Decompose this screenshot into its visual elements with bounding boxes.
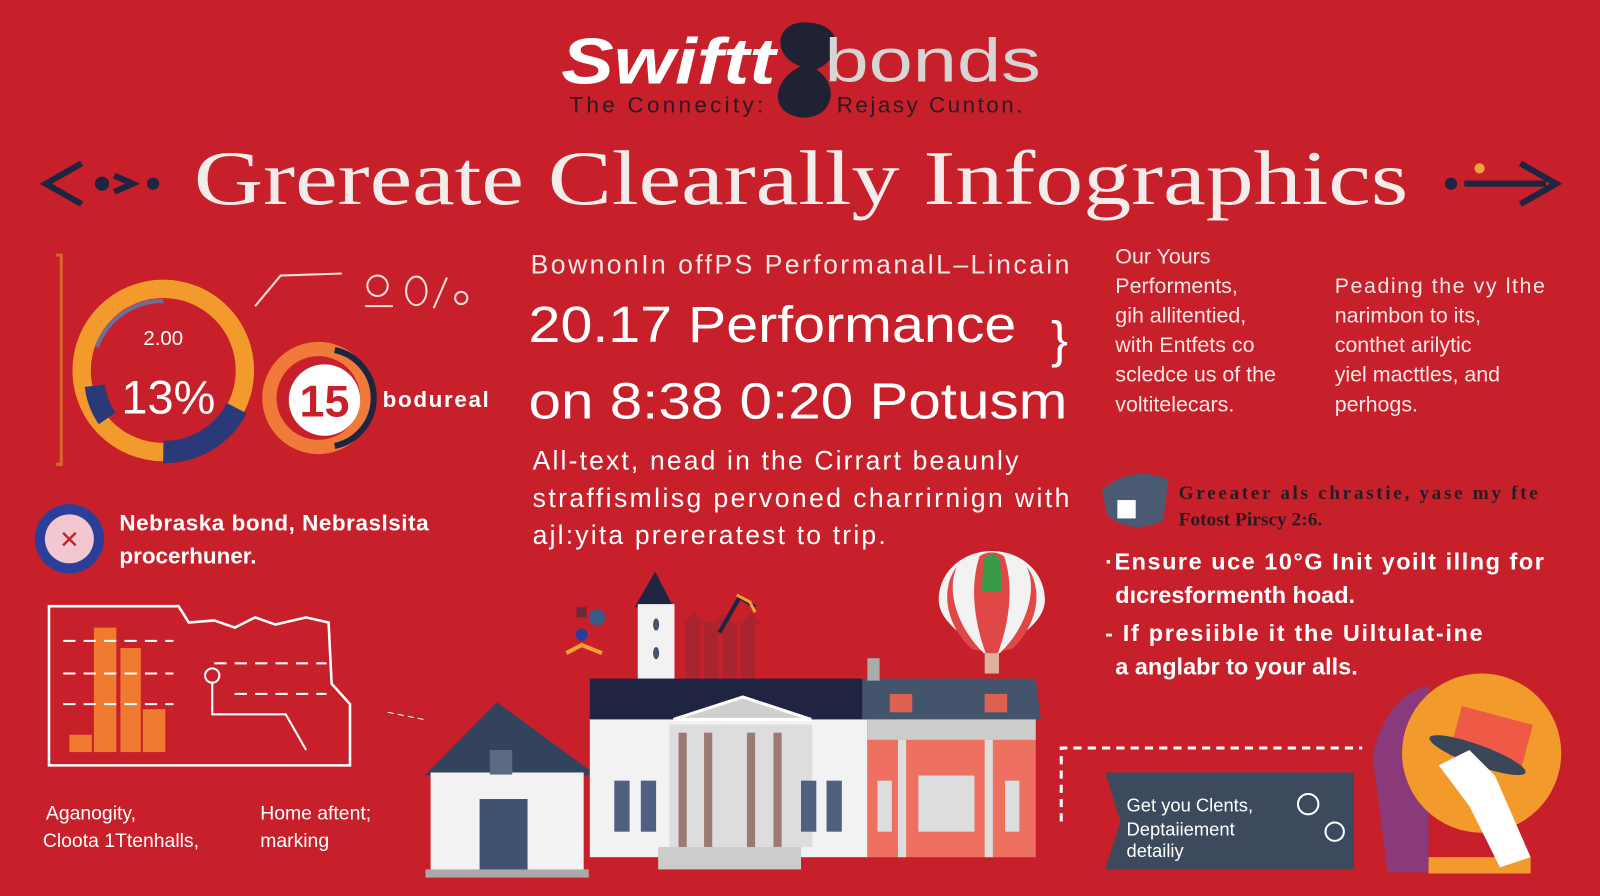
bottom labels — [43, 802, 371, 852]
right callout text: Greeater als chrastie, yase my fte — [1179, 483, 1538, 504]
title: Grereate Clearally Infographics — [194, 135, 1408, 221]
dark box: Deptaiiement — [1127, 819, 1235, 840]
text middle: } — [1051, 311, 1068, 368]
bullets: ·Ensure uce 10°G Init yoilt illng for — [1105, 548, 1544, 574]
badge Nebraska: ✕ — [59, 527, 80, 554]
badge Nebraska — [35, 504, 429, 574]
dark box: detailiy — [1127, 840, 1184, 861]
bottom labels: Aganogity, — [46, 802, 136, 824]
dashed connector — [1061, 748, 1362, 821]
right columns text: Peading the vy lthe — [1335, 274, 1545, 298]
badge Nebraska: procerhuner. — [119, 543, 257, 568]
logo — [561, 22, 1041, 118]
text middle: ajl:yita prereratest to trip. — [533, 520, 886, 550]
icons top — [255, 274, 467, 308]
text middle — [529, 250, 1069, 550]
right columns text: gih allitentied, — [1115, 303, 1246, 327]
right columns text: narimbon to its, — [1335, 303, 1481, 327]
hand illustration — [1372, 674, 1561, 874]
text middle: 20.17 Performance — [529, 296, 1016, 353]
buildings — [424, 571, 1041, 878]
badge Nebraska: Nebraska bond, Nebraslsita — [119, 511, 429, 536]
text middle: straffismlisg pervoned charrirnign with — [533, 483, 1069, 513]
arrow left — [46, 163, 156, 204]
right columns text: yiel macttles, and — [1335, 363, 1500, 387]
right columns text: Our Yours — [1115, 244, 1211, 268]
right columns text: with Entfets co — [1114, 333, 1255, 357]
text middle: on 8:38 0:20 Potusm — [529, 372, 1067, 429]
bullets — [1105, 548, 1544, 680]
right callout text — [1179, 483, 1538, 531]
bullets: dıcresformenth hoad. — [1115, 582, 1355, 608]
gauge chart 13% — [56, 255, 245, 464]
right columns text: scledce us of the — [1115, 363, 1276, 387]
hot air balloon — [939, 551, 1045, 674]
gauge 15: 15 — [300, 375, 349, 426]
dark box: Get you Clents, — [1127, 794, 1253, 815]
right columns text: conthet arilytic — [1335, 333, 1472, 357]
right columns text: Performents, — [1115, 274, 1238, 298]
logo: Rejasy Cunton. — [837, 92, 1022, 117]
gauge chart 13%: 13% — [121, 371, 215, 423]
right columns text — [1114, 244, 1545, 416]
gauge chart 13%: 2.00 — [143, 328, 183, 350]
right callout text: Fotost Pirscy 2:6. — [1179, 510, 1322, 531]
gauge 15: bodureal — [383, 387, 489, 412]
logo: Swiftt — [561, 25, 778, 98]
text middle: All-text, nead in the Cirrart beaunly — [533, 445, 1019, 475]
bottom labels: Home aftent; — [260, 802, 371, 824]
bullets: a anglabr to your alls. — [1115, 654, 1358, 680]
icon right — [1102, 474, 1168, 527]
text middle: BownonIn offPS PerformanalL–Lincain — [531, 250, 1069, 280]
bottom labels: Cloota 1Ttenhalls, — [43, 830, 199, 852]
logo: bonds — [824, 27, 1041, 95]
map chart — [49, 606, 423, 765]
logo: The Connecity: — [569, 92, 763, 117]
dark box — [1105, 772, 1354, 869]
right columns text: voltitelecars. — [1115, 392, 1234, 416]
bottom labels: marking — [260, 830, 329, 852]
arrow right — [1448, 163, 1556, 204]
gauge 15 — [269, 349, 489, 447]
right columns text: perhogs. — [1335, 392, 1418, 416]
bullets: - If presiible it the Uiltulat-ine — [1105, 620, 1483, 646]
